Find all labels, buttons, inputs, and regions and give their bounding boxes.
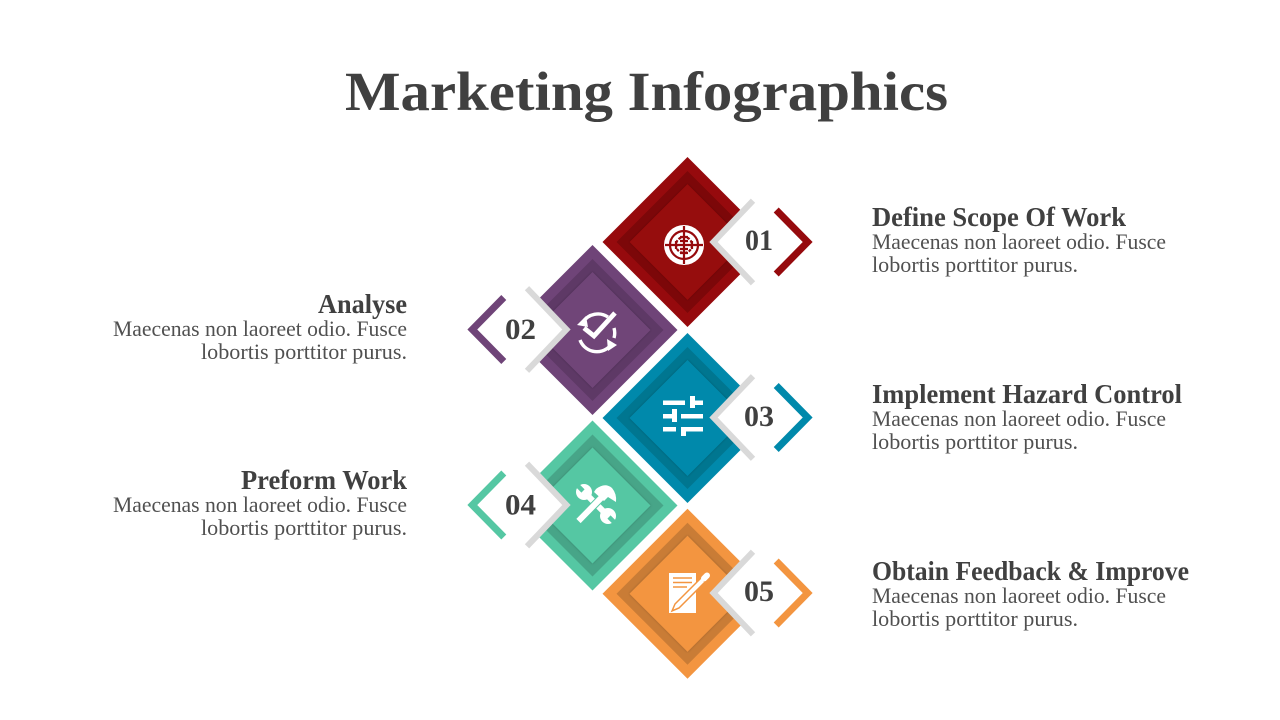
number tag 05: 05 [744, 575, 774, 608]
text block: analyse: Maecenas non laoreet odio. Fusce [113, 316, 407, 341]
text block: analyse [113, 289, 407, 364]
text block: implement hazard control: Maecenas non laoreet odio. Fusce [872, 406, 1166, 431]
number tag 02 [472, 288, 566, 371]
number tag 01 [714, 201, 808, 283]
text block: obtain feedback and improve: lobortis porttitor purus. [872, 606, 1078, 631]
title: Marketing Infographics [345, 61, 948, 122]
text block: define scope of work: Define Scope Of Work [872, 202, 1126, 232]
text block: preform work: Maecenas non laoreet odio. Fusce [113, 492, 407, 517]
number tag 03 [714, 376, 808, 459]
number tag 04 [472, 464, 566, 546]
panel: step 01 diamond [602, 157, 772, 327]
text block: preform work: lobortis porttitor purus. [201, 515, 407, 540]
icon: check with cycle arrows [577, 313, 617, 352]
text block: obtain feedback and improve: Obtain Feedback & Improve [872, 556, 1189, 586]
panel: step 02 diamond [508, 245, 678, 415]
text block: define scope of work: lobortis porttitor purus. [872, 252, 1078, 277]
text block: preform work: Preform Work [241, 465, 407, 495]
panel: step 03 diamond [602, 333, 772, 503]
icon: target [664, 225, 704, 265]
text block: analyse: Analyse [318, 289, 407, 319]
icon: sliders [663, 396, 703, 436]
text block: implement hazard control: lobortis porttitor purus. [872, 429, 1078, 454]
number tag 03: 03 [744, 400, 774, 433]
text block: obtain feedback and improve: Maecenas non laoreet odio. Fusce [872, 583, 1166, 608]
text block: preform work [113, 465, 407, 540]
number tag 05 [714, 552, 808, 634]
number tag 01: 01 [745, 224, 773, 257]
icon: document and pencil [669, 573, 707, 613]
icon: wrench and hammer [576, 484, 616, 524]
panel: step 05 diamond [602, 509, 772, 679]
text block: analyse: lobortis porttitor purus. [201, 339, 407, 364]
text block: define scope of work [872, 202, 1166, 277]
text block: implement hazard control [872, 379, 1182, 454]
number tag 02: 02 [505, 313, 536, 346]
panel: step 04 diamond [508, 420, 678, 590]
text block: implement hazard control: Implement Hazard Control [872, 379, 1182, 409]
text block: define scope of work: Maecenas non laoreet odio. Fusce [872, 229, 1166, 254]
text block: obtain feedback and improve [872, 556, 1189, 631]
number tag 04: 04 [505, 488, 536, 522]
